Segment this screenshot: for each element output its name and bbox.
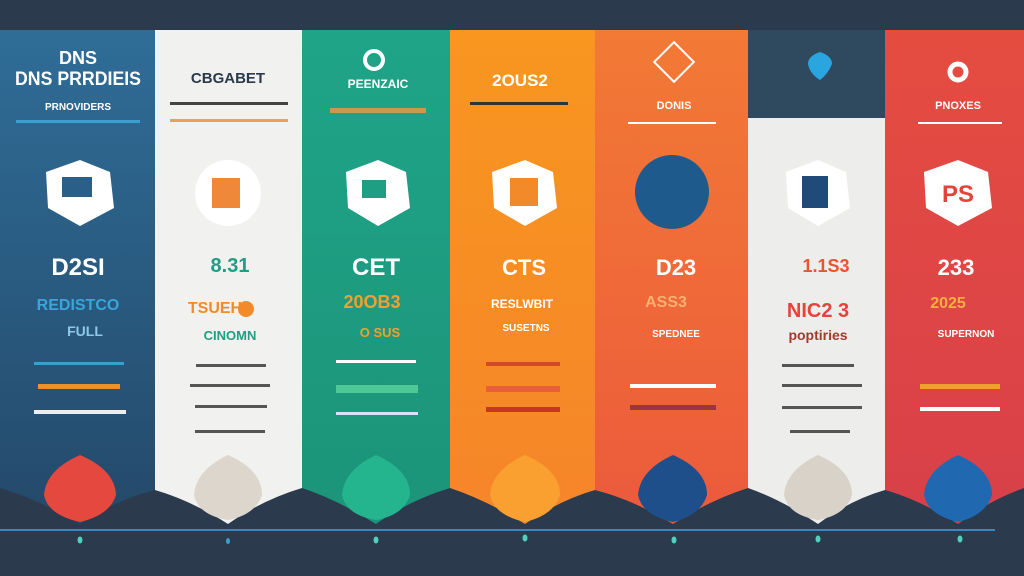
panel: column 2: [155, 30, 302, 524]
panel: column 6: NIC2 3: [787, 300, 849, 322]
panel: column 2: CINOMN: [204, 328, 256, 343]
panel: column 6: poptiries: [788, 327, 848, 343]
panel: column 7: PNOXES: [935, 100, 981, 112]
panel: column 7: 233: [938, 255, 974, 280]
panel: column 5: ASS3: [645, 294, 687, 311]
panel: column 4: CTS: [502, 255, 546, 280]
panel: column 5: D23: [656, 255, 696, 280]
panel: column 7: SUPERNON: [938, 329, 994, 340]
panel: column 1: [0, 30, 155, 524]
panel: column 1: D2SI: [51, 254, 105, 281]
timeline: [0, 529, 995, 544]
panel: column 3: PEENZAIC: [348, 77, 409, 91]
panel: column 6: 1.1S3: [802, 256, 850, 276]
title: DNS PRRDIEIS: [15, 69, 141, 90]
panel: column 5: DONIS: [657, 100, 691, 112]
panel: column 4: RESLWBIT: [491, 297, 554, 311]
panel: column 1: DNS: [59, 48, 97, 68]
panel: column 7: [885, 30, 1024, 524]
panel: column 1: REDISTCO: [37, 297, 119, 314]
panel: column 1: PRNOVIDERS: [45, 102, 111, 113]
panel: column 4: 2OUS2: [492, 71, 548, 90]
panel: column 3: [302, 30, 450, 524]
panel: column 5: [595, 30, 748, 524]
panel: column 4: [450, 30, 595, 524]
panel: column 6: [748, 30, 885, 524]
panel: column 2: 8.31: [211, 255, 249, 277]
panel: column 1: FULL: [67, 323, 103, 339]
panel: column 7: PS: [942, 181, 974, 208]
panel: column 2: TSUEH: [188, 300, 242, 317]
panel: column 3: O SUS: [360, 325, 401, 340]
panel: column 5: SPEDNEE: [652, 329, 700, 340]
panel: column 3: 20OB3: [343, 292, 401, 312]
panel: column 3: CET: [352, 254, 400, 281]
panel: column 7: 2025: [930, 295, 966, 312]
panel: column 2: CBGABET: [191, 70, 265, 87]
panel: column 4: SUSETNS: [502, 323, 550, 334]
